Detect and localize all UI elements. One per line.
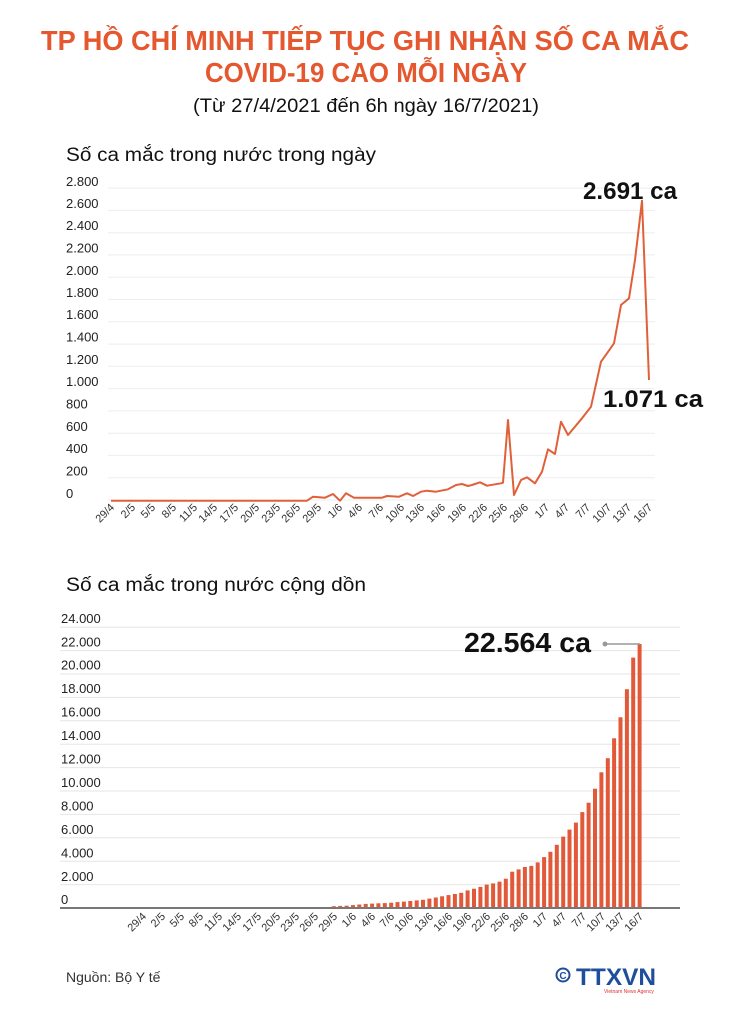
x axis labels: 10/6 xyxy=(392,911,416,934)
x axis labels: 16/7 xyxy=(631,502,655,525)
x axis labels: 8/5 xyxy=(187,911,206,930)
x axis labels: 1/7 xyxy=(531,911,550,930)
x axis labels: 20/5 xyxy=(259,911,283,934)
callout: cumulative total: 22.564 ca xyxy=(464,627,591,658)
x axis labels: 16/7 xyxy=(622,911,646,934)
x axis labels: 1/6 xyxy=(326,502,345,521)
y axis labels: 18.000 xyxy=(61,681,101,696)
title: TP HỒ CHÍ MINH TIẾP TỤC GHI NHẬN SỐ CA MẮC xyxy=(41,24,689,56)
line chart: daily cases xyxy=(66,174,655,525)
x axis labels: 13/6 xyxy=(412,911,436,934)
x axis labels: 14/5 xyxy=(196,502,220,525)
x axis labels: 16/6 xyxy=(431,911,455,934)
x axis labels: 28/6 xyxy=(507,502,531,525)
x axis labels: 26/5 xyxy=(279,502,303,525)
x axis labels: 13/7 xyxy=(603,911,627,934)
x axis labels: 25/6 xyxy=(488,911,512,934)
data line xyxy=(111,201,649,501)
x axis labels: 10/6 xyxy=(383,502,407,525)
x axis labels: 22/6 xyxy=(466,502,490,525)
y axis labels: 2.800 xyxy=(66,174,99,189)
y axis labels xyxy=(61,611,101,907)
source: Nguồn: Bộ Y tế xyxy=(66,969,161,985)
y axis labels: 0 xyxy=(61,892,68,907)
x axis labels: 10/7 xyxy=(590,502,614,525)
y axis labels: 24.000 xyxy=(61,611,101,626)
x axis labels xyxy=(93,502,655,525)
y axis labels: 22.000 xyxy=(61,634,101,650)
y axis labels: 800 xyxy=(66,396,88,412)
x axis labels: 11/5 xyxy=(177,502,200,525)
y axis labels: 8.000 xyxy=(61,798,94,814)
x axis labels: 13/6 xyxy=(403,502,427,525)
x axis labels: 5/5 xyxy=(139,502,158,521)
x axis labels: 23/5 xyxy=(259,502,283,525)
x axis labels: 7/6 xyxy=(367,502,386,521)
x axis labels: 29/4 xyxy=(93,502,117,525)
x axis labels: 28/6 xyxy=(507,911,531,934)
x axis labels: 4/6 xyxy=(359,911,378,930)
logo: TTXVN: Vietnam News Agency xyxy=(604,989,654,995)
x axis labels: 20/5 xyxy=(238,502,262,525)
x axis labels: 1/6 xyxy=(340,911,359,930)
y axis labels: 12.000 xyxy=(61,752,101,766)
y axis labels: 6.000 xyxy=(61,822,94,837)
y axis labels: 1.600 xyxy=(66,307,99,322)
y axis labels: 1.000 xyxy=(66,374,99,389)
y axis labels xyxy=(66,174,99,501)
x axis labels: 1/7 xyxy=(533,502,552,521)
x axis labels: 7/7 xyxy=(570,911,589,930)
x axis labels: 14/5 xyxy=(220,911,244,934)
x axis labels: 25/6 xyxy=(486,502,510,525)
x axis labels: 2/5 xyxy=(119,502,138,521)
y axis labels: 200 xyxy=(66,464,88,478)
bar chart: cumulative cases xyxy=(60,611,680,934)
x axis labels: 29/5 xyxy=(300,502,324,525)
x axis labels: 19/6 xyxy=(445,502,469,525)
x axis labels: 4/7 xyxy=(553,502,572,521)
x axis labels: 10/7 xyxy=(584,911,608,934)
y axis labels: 10.000 xyxy=(61,775,101,790)
x axis labels: 2/5 xyxy=(149,911,168,930)
logo: TTXVN xyxy=(556,964,656,995)
x axis labels: 8/5 xyxy=(160,502,179,521)
y axis labels: 16.000 xyxy=(61,704,101,720)
heading: daily chart: Số ca mắc trong nước trong ngày xyxy=(66,144,377,166)
y axis labels: 20.000 xyxy=(61,658,101,672)
y axis labels: 2.000 xyxy=(61,869,94,884)
x axis labels: 7/6 xyxy=(378,911,397,930)
y axis labels: 2.600 xyxy=(66,196,99,211)
y axis labels: 1.800 xyxy=(66,285,99,300)
subtitle: (Từ 27/4/2021 đến 6h ngày 16/7/2021) xyxy=(193,96,539,117)
x axis labels: 7/7 xyxy=(574,502,593,521)
y axis labels: 4.000 xyxy=(61,846,94,860)
bars xyxy=(332,644,642,908)
x axis labels: 22/6 xyxy=(469,911,493,934)
y axis labels: 2.000 xyxy=(66,263,99,278)
x axis labels: 17/5 xyxy=(217,502,241,525)
x axis labels: 11/5 xyxy=(202,911,225,934)
x axis labels: 29/4 xyxy=(125,911,149,934)
x axis labels: 26/5 xyxy=(297,911,321,934)
x axis labels: 23/5 xyxy=(278,911,302,934)
y axis labels: 14.000 xyxy=(61,728,101,743)
x axis labels xyxy=(125,911,646,934)
y axis labels: 1.400 xyxy=(66,330,99,344)
title xyxy=(41,24,689,88)
y axis labels: 400 xyxy=(66,441,88,456)
y axis labels: 2.400 xyxy=(66,218,99,233)
y axis labels: 0 xyxy=(66,486,73,501)
x axis labels: 17/5 xyxy=(240,911,264,934)
callout: peak: 2.691 ca xyxy=(583,178,678,205)
logo: TTXVN: TTXVN xyxy=(576,964,656,991)
x axis labels: 5/5 xyxy=(168,911,187,930)
y axis labels: 600 xyxy=(66,419,88,434)
callout: latest: 1.071 ca xyxy=(603,386,704,413)
logo: TTXVN: C xyxy=(559,971,567,982)
title: COVID-19 CAO MỖI NGÀY xyxy=(205,57,527,88)
x axis labels: 13/7 xyxy=(610,502,634,525)
x axis labels: 4/6 xyxy=(346,502,365,521)
heading: cumulative chart: Số ca mắc trong nước cộng dồn xyxy=(66,574,366,596)
x axis labels: 4/7 xyxy=(550,911,569,930)
x axis labels: 16/6 xyxy=(424,502,448,525)
x axis labels: 19/6 xyxy=(450,911,474,934)
y axis labels: 2.200 xyxy=(66,240,99,256)
y axis labels: 1.200 xyxy=(66,352,99,367)
x axis labels: 29/5 xyxy=(316,911,340,934)
